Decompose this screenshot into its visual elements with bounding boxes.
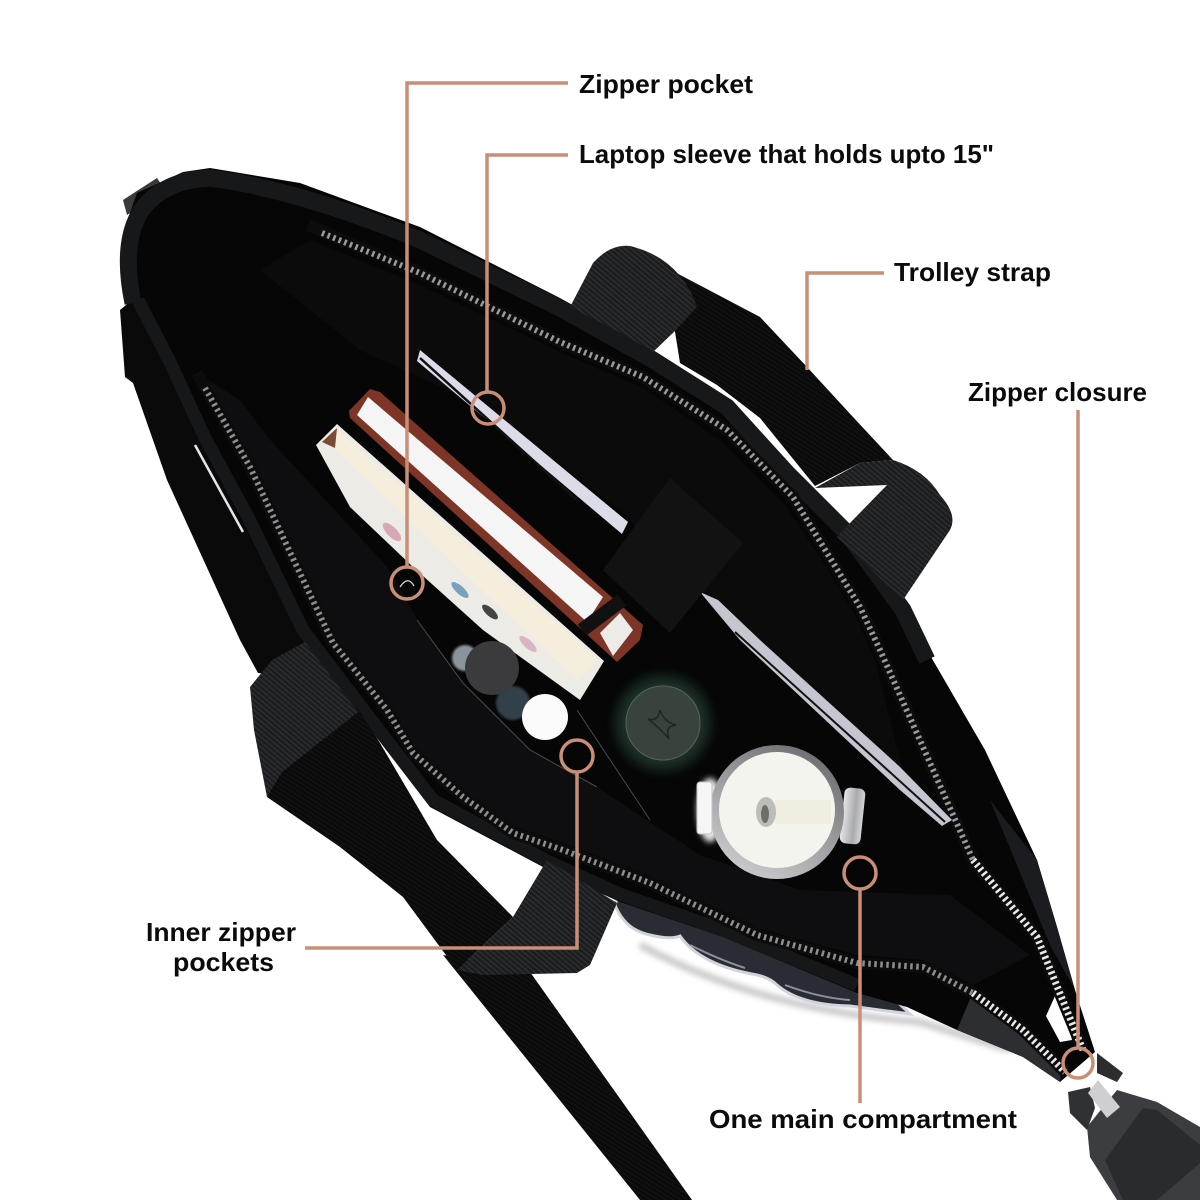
quilted lower panel [615, 890, 910, 1014]
callout: one main compartment [709, 857, 1017, 1134]
clear water bottle [697, 745, 866, 879]
green bottle cap [616, 676, 710, 770]
bottom zipper [197, 373, 1065, 1072]
inner front-left panel [197, 373, 1030, 985]
bottom handle strap [250, 642, 617, 975]
book cover marks [380, 520, 539, 654]
right side bag panel [990, 800, 1075, 990]
small bottle with white cap [522, 694, 568, 740]
zipper pull and leather tab [1068, 1053, 1200, 1200]
white notch between zipper tapes [1046, 985, 1072, 1042]
callout: laptop sleeve [472, 139, 994, 424]
lower black band [267, 708, 513, 970]
stitching lines [417, 620, 650, 820]
callout: trolley strap [807, 257, 1051, 370]
second strap loop [815, 460, 952, 600]
back strap behind bag [120, 300, 320, 680]
lower bag tape [957, 992, 1062, 1082]
first strap loop [570, 246, 697, 352]
right strap loop [457, 860, 617, 975]
callout: zipper closure: Zipper closure [968, 377, 1147, 407]
elastic band [582, 600, 622, 630]
callout: inner zipper pockets [146, 740, 593, 977]
callout: zipper pocket [391, 69, 753, 599]
top handle strap [570, 246, 952, 600]
left strap loop [250, 642, 358, 797]
long shoulder strap [443, 955, 692, 1200]
book: cream notebook [316, 424, 604, 700]
callout: inner zipper pockets: pockets [173, 947, 274, 977]
white slit between strap and rim [195, 445, 243, 532]
rim shading [128, 178, 927, 660]
book: red-edged notebook [349, 389, 643, 662]
callout: inner zipper pockets: Inner zipper [146, 917, 296, 947]
laptop retainer loop [603, 478, 743, 633]
callout: one main compartment: One main compartment [709, 1104, 1017, 1134]
small bottle with dark cap [452, 641, 530, 720]
inner back panel [260, 240, 905, 780]
soft shadow under bag [640, 945, 1010, 1050]
rear main strap band [667, 268, 893, 486]
callout: zipper closure [968, 377, 1147, 1078]
callout: trolley strap: Trolley strap [894, 257, 1051, 287]
top-left corner nub [123, 178, 165, 215]
bag body [123, 168, 1095, 1082]
laptop [417, 350, 952, 826]
callout: zipper pocket: Zipper pocket [579, 69, 753, 99]
callout: laptop sleeve: Laptop sleeve that holds upto 15" [579, 139, 994, 169]
top zipper [308, 225, 1083, 1050]
